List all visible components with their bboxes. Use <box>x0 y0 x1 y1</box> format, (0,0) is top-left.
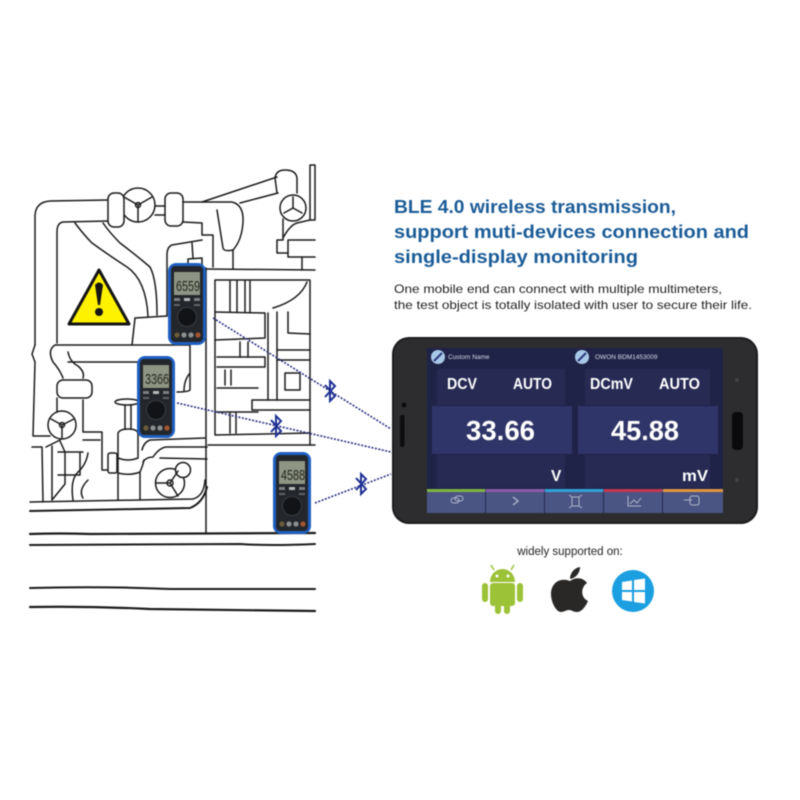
supported platforms caption: widely supported on: <box>516 546 623 558</box>
icon: lower left valve <box>48 411 76 439</box>
description text <box>394 282 752 312</box>
multimeter 1 <box>168 263 206 345</box>
left reading values: 33.66 <box>466 415 535 446</box>
phone speaker and camera <box>400 402 406 447</box>
icon: apple <box>551 567 588 612</box>
right reading values: DCmV <box>590 376 634 393</box>
icon: bluetooth symbols <box>271 381 366 494</box>
line drawing: industrial pipework <box>30 165 315 611</box>
icon: gate valve stem <box>108 399 207 500</box>
icon: windows <box>612 570 654 612</box>
title: support muti-devices connection and <box>394 221 749 242</box>
reading panels <box>432 369 718 488</box>
phone home button <box>732 378 743 482</box>
right reading values: 45.88 <box>611 415 679 446</box>
icon: lower right valve wheel <box>156 462 190 498</box>
icon: large top valve <box>108 188 183 227</box>
title: BLE 4.0 wireless transmission, <box>394 196 676 217</box>
left reading values: AUTO <box>513 376 552 393</box>
right reading values: AUTO <box>659 376 700 393</box>
right reading values: mV <box>682 468 709 485</box>
multimeter 3 <box>273 452 311 534</box>
right reading values <box>590 376 709 485</box>
icon: android <box>482 565 523 614</box>
description text: the test object is totally isolated with user to secure their life. <box>394 298 752 312</box>
device labels <box>431 350 658 364</box>
phone screen <box>427 348 723 513</box>
multimeter 3: 4588 <box>281 467 305 484</box>
icon: small top right valve <box>280 195 306 221</box>
smartphone <box>392 337 758 524</box>
device labels: OWON BDM1453009 <box>595 354 658 361</box>
multimeter 2 <box>137 356 175 438</box>
device labels: Custom Name <box>448 354 490 361</box>
bottom tab bar <box>427 489 723 513</box>
icon: yellow warning triangle <box>69 270 129 324</box>
multimeter 1: 6559 <box>176 278 200 295</box>
dotted wireless links <box>177 318 391 503</box>
title: single-display monitoring <box>394 246 638 267</box>
left reading values: DCV <box>447 376 478 393</box>
left reading values: V <box>551 468 562 485</box>
left reading values <box>447 376 562 485</box>
multimeter 2: 3366 <box>145 371 169 388</box>
title <box>394 196 749 267</box>
description text: One mobile end can connect with multiple multimeters, <box>394 282 722 296</box>
